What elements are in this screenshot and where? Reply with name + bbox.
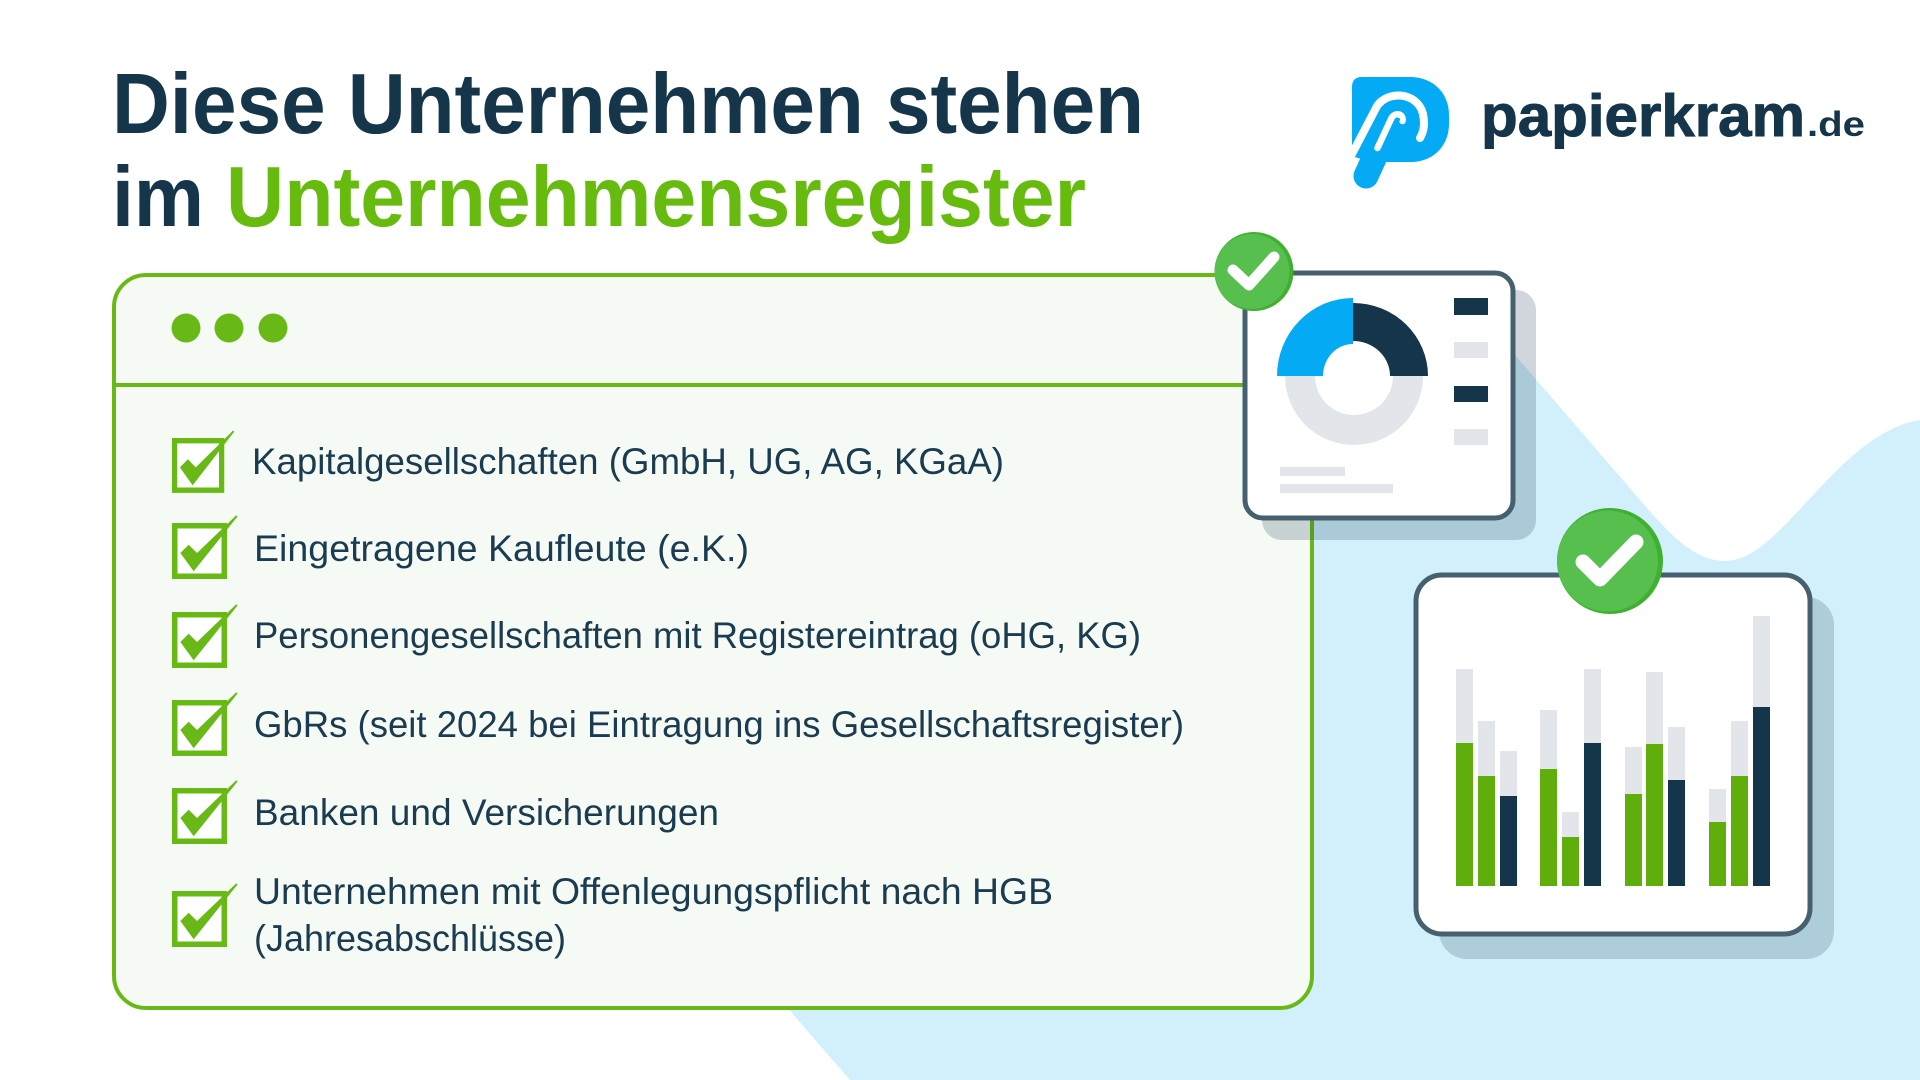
list item 6: Unternehmen mit Offenlegungspflicht nach HGB [254, 871, 1053, 912]
check badge small [1214, 232, 1294, 311]
bar chart [1456, 616, 1770, 886]
list item 5 [175, 780, 719, 841]
panel: company list [114, 275, 1312, 1008]
list item 4: GbRs (seit 2024 bei Eintragung ins Gesellschaftsregister) [254, 704, 1184, 745]
list item 6 [175, 871, 1053, 959]
logo: papierkram.de [1352, 77, 1865, 176]
list item 6: (Jahresabschlüsse) [254, 918, 566, 959]
title [112, 57, 1144, 245]
card: donut chart [1245, 273, 1536, 540]
title: Unternehmensregister [226, 150, 1086, 245]
card: bar chart [1416, 575, 1834, 959]
icon: paperclip P [1352, 77, 1449, 176]
list item 1 [175, 430, 1004, 490]
text placeholder lines [1280, 467, 1393, 493]
list item 5: Banken und Versicherungen [254, 792, 719, 833]
list item 2: Eingetragene Kaufleute (e.K.) [254, 528, 749, 569]
check badge large [1557, 508, 1663, 614]
legend bars [1454, 298, 1488, 445]
title: Diese Unternehmen stehen [112, 57, 1144, 152]
list item 1: Kapitalgesellschaften (GmbH, UG, AG, KGaA) [252, 441, 1004, 482]
title: im [112, 150, 204, 245]
list item 2 [175, 515, 749, 576]
window dots [172, 314, 288, 342]
list item 3 [175, 604, 1141, 665]
logo wordmark: .de [1807, 105, 1865, 144]
background wave [785, 330, 1920, 1080]
list item 3: Personengesellschaften mit Registereintrag (oHG, KG) [254, 615, 1141, 656]
list item 4 [175, 692, 1184, 753]
donut chart [1277, 298, 1428, 445]
logo wordmark: papierkram [1481, 83, 1805, 149]
